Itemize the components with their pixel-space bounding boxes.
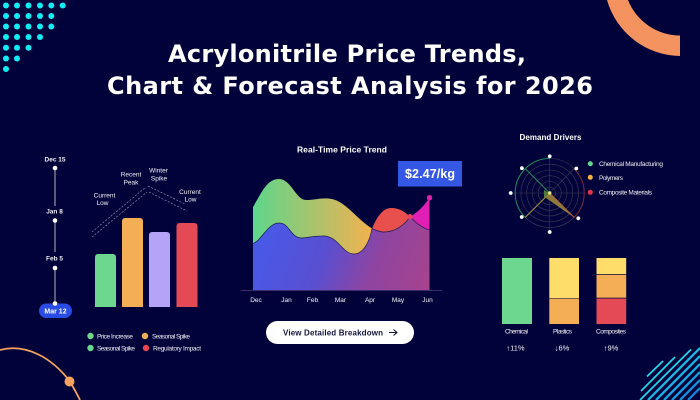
radar legend: Chemical Manufacturing	[599, 161, 663, 168]
price callout: $2.47/kg	[405, 167, 455, 181]
radar legend	[588, 161, 663, 196]
bar chart: Current	[179, 189, 201, 196]
upper green-orange band	[253, 179, 372, 254]
bar: composites	[596, 258, 626, 324]
bar legend: Regulatory Impact	[153, 346, 201, 352]
stacked bars: ↑11%	[506, 344, 525, 352]
timeline: Dec 15	[45, 156, 66, 164]
bar chart: Current	[94, 192, 116, 200]
bar legend: Seasonal Spike	[152, 334, 190, 340]
decorative stripes bottom right	[640, 348, 700, 400]
area chart: Dec	[250, 297, 263, 304]
stacked bars	[502, 258, 627, 352]
bar chart: Peak	[124, 180, 139, 186]
date pill	[39, 301, 72, 318]
area chart: Feb	[307, 297, 318, 304]
stacked bars: ↑9%	[604, 344, 619, 352]
bar chart: Spike	[151, 176, 168, 182]
decorative arc top right	[607, 0, 680, 56]
bar chart	[92, 168, 201, 307]
radar legend: Polymers	[599, 175, 624, 182]
stacked bars: ↓6%	[555, 344, 570, 352]
bar chart: Winter	[149, 168, 169, 174]
title: Chart & Forecast Analysis for 2026	[107, 72, 593, 100]
lower blue-purple area	[253, 217, 430, 290]
stacked bars: Composites	[596, 328, 627, 336]
radar heading: Demand Drivers	[520, 133, 582, 142]
area chart: Jan	[281, 297, 292, 304]
area chart: May	[392, 297, 405, 304]
decorative arc bottom left	[0, 348, 80, 400]
magenta band	[410, 198, 430, 230]
timeline: Jan 8	[46, 208, 63, 216]
radar chart	[509, 154, 586, 234]
date pill: Mar 12	[44, 308, 67, 316]
area chart: Mar	[335, 297, 347, 304]
timeline	[39, 156, 72, 318]
radar legend: Composite Materials	[599, 190, 653, 196]
title	[107, 40, 593, 100]
stacked bars: Plastics	[553, 328, 573, 336]
price callout	[398, 161, 462, 186]
bar: chemical	[502, 258, 532, 324]
bar: plastics	[549, 258, 579, 324]
area chart: Apr	[365, 297, 376, 304]
button	[266, 321, 414, 344]
decorative dot grid	[3, 2, 66, 72]
bar chart: Low	[97, 200, 109, 207]
bar chart: Low	[185, 196, 197, 204]
bar legend	[87, 333, 201, 352]
timeline: Feb 5	[46, 256, 63, 262]
title: Acrylonitrile Price Trends,	[168, 40, 526, 68]
red band	[372, 208, 410, 232]
stacked bars: Chemical	[505, 328, 529, 336]
area chart: Jun	[422, 297, 433, 304]
button: View Detailed Breakdown	[283, 328, 383, 338]
icon: arrow	[389, 330, 397, 336]
bar legend: Seasonal Spike	[97, 346, 135, 352]
area chart heading: Real-Time Price Trend	[297, 144, 387, 154]
area chart	[241, 179, 442, 304]
bar chart: Recent	[121, 172, 141, 178]
bar legend: Price Increase	[97, 334, 133, 340]
